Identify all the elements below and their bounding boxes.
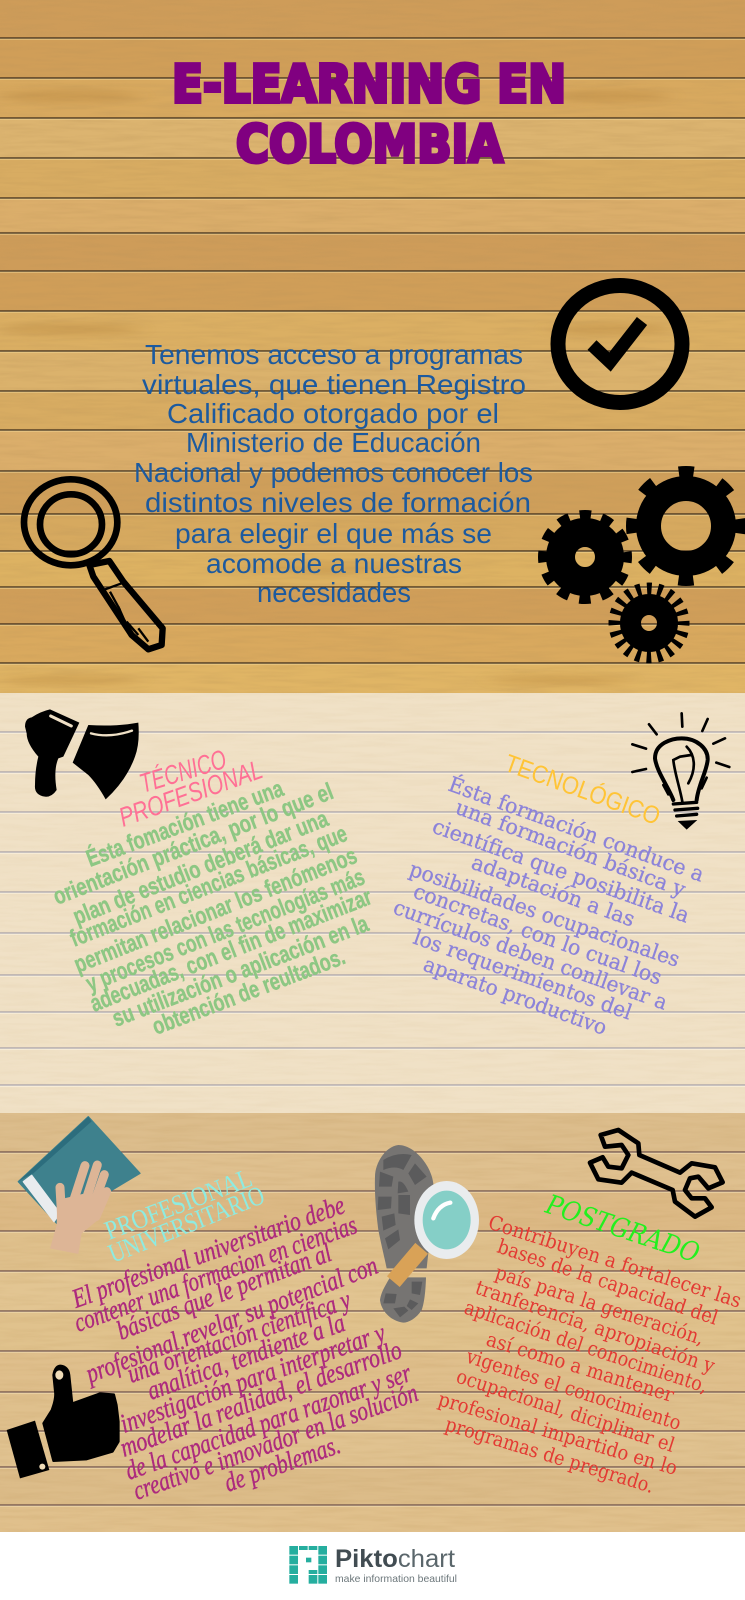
intro text block: virtuales, que tienen Registro xyxy=(142,369,526,400)
logo wordmark: Piktochart xyxy=(335,1545,455,1573)
intro text block: para elegir el que más se xyxy=(175,518,492,549)
icon: axe xyxy=(25,709,139,799)
text block: profesional universitario: una orientación científica y xyxy=(123,1284,354,1389)
intro text block: Calificado otorgado por el xyxy=(167,398,499,429)
text block: postgrado: ocupacional, diciplinar el xyxy=(453,1364,678,1457)
heading: profesional universitario: UNIVERSITARIO xyxy=(104,1180,269,1269)
icon: logo mark xyxy=(289,1546,327,1584)
intro text block: necesidades xyxy=(257,577,411,608)
text block: tecnico profesional: orientación práctica, por lo que el xyxy=(49,778,337,911)
text block: tecnologico: una formación básica y xyxy=(452,795,689,902)
heading: tecnico profesional: TÉCNICO xyxy=(136,744,230,799)
icon: check mark in circle xyxy=(558,286,682,402)
icon: book with hand xyxy=(18,1117,140,1254)
panel: light wood section with tecnico and tecnologico xyxy=(0,693,745,1113)
text block: tecnico profesional: obtención de reultados. xyxy=(149,943,349,1041)
text block: postgrado: programas de pregrado. xyxy=(443,1412,657,1498)
text block: profesional universitario: El profesional universitario debe xyxy=(67,1190,349,1314)
title: COLOMBIA xyxy=(236,115,503,175)
text block: tecnico profesional: formación en ciencias básicas, que xyxy=(66,820,351,953)
intro text block: Ministerio de Educación xyxy=(186,427,481,458)
text block: postgrado: aplicación del conocimiento, xyxy=(461,1295,711,1398)
footer: piktochart logo xyxy=(289,1545,457,1585)
panel: top wood section with title and introduction xyxy=(0,0,745,694)
text block: profesional universitario: contener una formacion en ciencias xyxy=(70,1209,361,1338)
icon: wrench xyxy=(590,1130,723,1217)
text block: tecnico profesional: y procesos con las tecnologías más xyxy=(82,864,369,998)
title xyxy=(172,55,566,175)
icon: medium gear xyxy=(544,516,626,598)
text block: tecnologico: aparato productivo xyxy=(420,952,610,1040)
text block: profesional universitario: analítica, tendiente a la xyxy=(143,1307,349,1406)
icon: magnifying glass sketch xyxy=(24,479,163,649)
text block: profesional universitario: básicas que le permitan al xyxy=(113,1237,335,1346)
text block: tecnico profesional: adecuadas, con el fin de maximizar xyxy=(86,883,376,1018)
text block: tecnologico: adaptación a las xyxy=(468,850,638,932)
text block: postgrado: bases de la capacidad del xyxy=(494,1234,721,1330)
intro text block: acomode a nuestras xyxy=(206,548,462,579)
text block: postgrado: tranferencia, apropiación y xyxy=(472,1275,719,1378)
heading: postgrado: POSTGRADO xyxy=(541,1189,703,1269)
icon: small gear xyxy=(616,590,682,656)
text block: tecnico profesional xyxy=(49,774,376,1041)
text block: tecnologico: científica que posibilita la xyxy=(429,814,693,928)
text block: tecnologico xyxy=(390,772,707,1040)
text block: postgrado: así como a mantener xyxy=(484,1327,677,1407)
text block: tecnico profesional: permitan relacionar los fenómenos xyxy=(70,842,361,979)
text block: postgrado: país para la generación, xyxy=(492,1260,707,1350)
intro text block xyxy=(134,339,533,608)
icon: light bulb xyxy=(632,713,729,830)
text block: tecnologico: concretas, con lo cual los xyxy=(410,879,665,990)
text block: tecnico profesional: su utilización o aplicación en la xyxy=(109,910,373,1033)
title: E-LEARNING EN xyxy=(172,55,566,115)
text block: profesional universitario: modelar la realidad, el desarrollo xyxy=(116,1334,406,1463)
text block: postgrado xyxy=(436,1210,744,1498)
text block: postgrado: vigentes el conocimiento xyxy=(463,1344,684,1435)
icon: large gear xyxy=(632,472,740,580)
text block: profesional universitario: investigación para interpretar y xyxy=(116,1317,389,1439)
text block: profesional universitario xyxy=(67,1190,422,1506)
text block: tecnologico: Ésta formación conduce a xyxy=(445,772,707,887)
text block: tecnologico: currículos deben conllevar a xyxy=(390,895,671,1015)
text block: tecnologico: los requerimientos del xyxy=(410,925,635,1025)
text block: tecnico profesional: plan de estudio deberá dar una xyxy=(69,805,333,931)
text block: tecnico profesional: Ésta fomación tiene una xyxy=(82,774,288,873)
text block: profesional universitario: de problemas. xyxy=(220,1429,344,1498)
text block: postgrado: profesional impartido en lo xyxy=(436,1387,680,1480)
text block: tecnologico: posibilidades ocupacionales xyxy=(406,857,683,972)
heading: profesional universitario: PROFESIONAL xyxy=(100,1163,256,1246)
panel: mid wood section with profesional universitario and postgrado xyxy=(0,1113,745,1532)
text block: profesional universitario: de la capacidad para razonar y ser xyxy=(121,1357,415,1486)
intro text block: Tenemos acceso a programas xyxy=(145,339,523,370)
logo tagline: make information beautiful xyxy=(335,1573,457,1585)
heading: tecnologico: TECNOLÓGICO xyxy=(501,748,664,831)
intro text block: distintos niveles de formación xyxy=(145,487,531,518)
heading: tecnico profesional: PROFESIONAL xyxy=(115,754,266,833)
intro text block: Nacional y podemos conocer los xyxy=(134,457,533,488)
text block: profesional universitario: profesional revelar su potencial con xyxy=(80,1250,382,1389)
icon: footprint with magnifier xyxy=(375,1145,479,1323)
icon: thumbs up xyxy=(7,1366,119,1478)
text block: profesional universitario: creativo e innovador en la solución xyxy=(129,1377,422,1506)
